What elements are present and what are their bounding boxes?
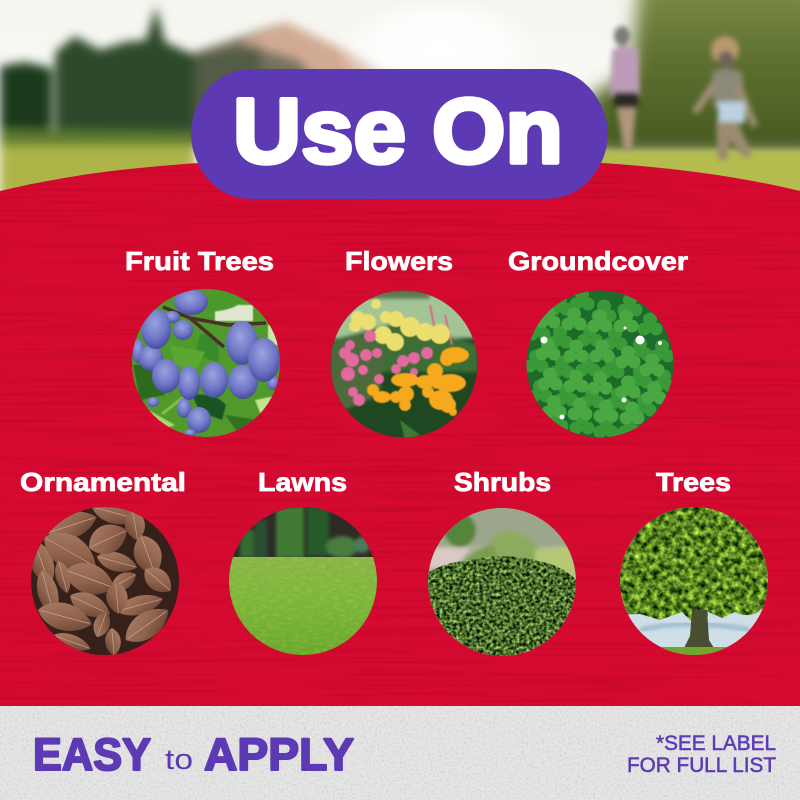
heading: Flowers: Flowers <box>345 246 453 276</box>
heading: Fruit Trees: Fruit Trees <box>125 246 274 276</box>
tagline: EASY to APPLY: to <box>165 744 193 776</box>
footnote: see label for full list: *SEE LABEL <box>656 732 776 755</box>
tagline: EASY to APPLY: APPLY <box>204 729 354 780</box>
title badge: Use On: Use On <box>233 80 563 182</box>
heading: Groundcover: Groundcover <box>508 246 688 276</box>
photo: lawn with hedge trees <box>228 506 378 657</box>
panel: footer <box>0 706 800 800</box>
tagline: EASY to APPLY: EASY <box>33 729 151 780</box>
photo: plums on branch <box>130 287 282 439</box>
photo: bronze ornamental leaves <box>31 507 179 655</box>
background photo: yard with house and children <box>0 0 800 200</box>
footnote: see label for full list <box>627 732 776 777</box>
heading: Shrubs: Shrubs <box>454 467 551 497</box>
tagline: EASY to APPLY <box>33 729 354 780</box>
heading: Trees: Trees <box>656 467 731 497</box>
footnote: see label for full list: FOR FULL LIST <box>627 754 776 777</box>
photo: trimmed shrubs <box>425 506 578 660</box>
panel: red wood-grain area <box>0 150 800 706</box>
photo: clover groundcover <box>524 288 676 439</box>
heading: Ornamental: Ornamental <box>20 467 186 497</box>
photo: oak tree <box>618 505 770 659</box>
photo: flower bed <box>330 290 478 440</box>
title badge: Use On <box>191 69 608 199</box>
heading: Lawns: Lawns <box>258 467 347 497</box>
